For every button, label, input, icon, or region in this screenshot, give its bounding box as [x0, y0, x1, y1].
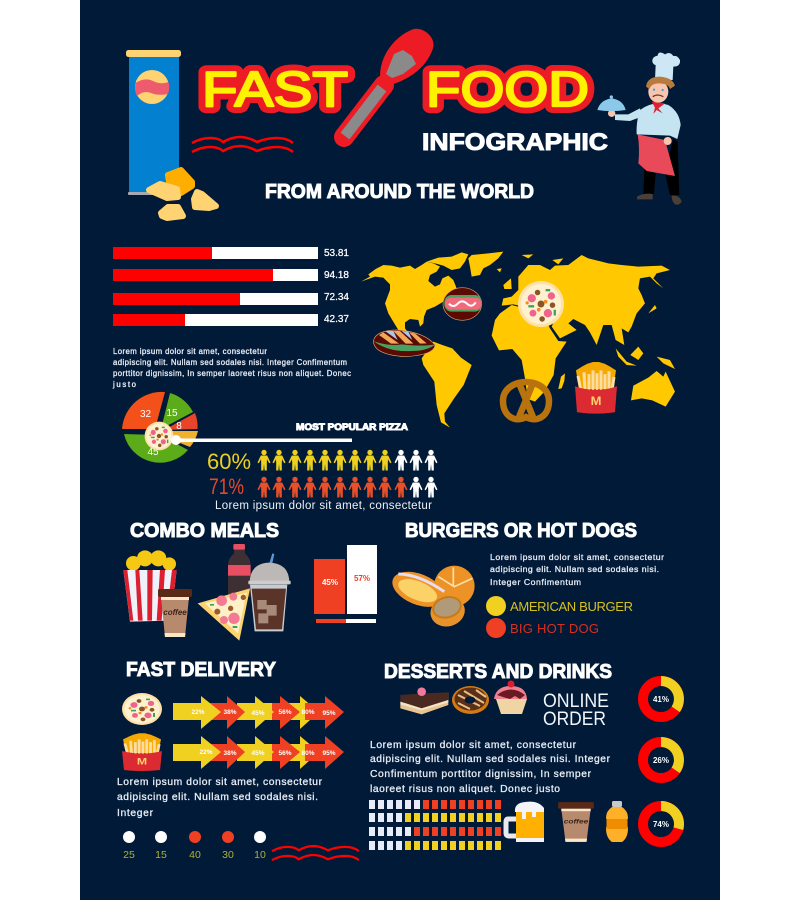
bar chart: four progress bars: 94.18: [324, 270, 349, 281]
arrow row 2: 95%: [322, 750, 336, 757]
title: FOOD: FOOD: [426, 63, 589, 117]
bar chart: four progress bars: [113, 247, 349, 326]
text block: lorem burgers: Integer Confimentum: [490, 577, 581, 587]
donut: 26 percent: [643, 742, 679, 778]
pie chart: pizza share: [122, 392, 198, 463]
icon: iced drink: [248, 553, 291, 631]
stat: 71 percent: 71%: [209, 474, 244, 499]
arrow row 1: 45%: [251, 710, 265, 717]
bar chart: four progress bars: 53.81: [324, 248, 349, 259]
icon: red squiggle bottom: [272, 846, 359, 860]
stat: 60 percent: 60%: [207, 449, 251, 474]
arrow row 2: 56%: [278, 750, 292, 757]
donut: 74 percent: 74%: [653, 820, 669, 829]
text: online order: ORDER: [543, 709, 606, 730]
heading: burgers or hot dogs: BURGERS OR HOT DOGS: [405, 520, 637, 542]
text block: lorem delivery: [117, 777, 323, 819]
text block: lorem under bars: adipiscing elit. Nullam sed sodales nisi. Integer Confimentum: [113, 358, 347, 367]
icon: chips can: [126, 50, 216, 218]
arrow row 1: [173, 696, 344, 729]
bar chart: four progress bars: 42.37: [324, 314, 349, 325]
legend: big hot dog: BIG HOT DOG: [510, 621, 599, 636]
icon: beer mug: [506, 802, 544, 842]
arrow row 2: 22%: [199, 749, 213, 756]
donut: 74 percent: [643, 806, 679, 842]
arrow row 1: 22%: [191, 709, 205, 716]
text block: lorem under bars: justo: [112, 380, 137, 389]
arrow row 1: 95%: [322, 710, 336, 717]
dot legend with numbers: [123, 831, 266, 861]
arrow row 2: 38%: [223, 750, 237, 757]
chart: square unit grid: [369, 800, 501, 850]
pie chart: pizza share: 15: [166, 408, 178, 419]
icon: spatula: [344, 31, 432, 137]
legend: big hot dog: [486, 618, 599, 638]
heading: fast delivery: FAST DELIVERY: [126, 659, 277, 681]
arrow row 1: 56%: [278, 709, 292, 716]
pictogram: red row: [258, 477, 438, 498]
text block: lorem delivery: adipiscing elit. Nullam sed sodales nisi.: [117, 792, 318, 803]
dot legend with numbers: 15: [155, 849, 167, 861]
dot legend with numbers: 25: [123, 849, 135, 861]
icon: cake slice: [400, 687, 448, 714]
icon: fries delivery: [122, 733, 162, 771]
icon: juice bottle: [606, 801, 628, 842]
heading: most popular pizza: MOST POPULAR PIZZA: [296, 422, 408, 433]
text block: lorem desserts: laoreet risus non aliquet. Donec justo: [370, 784, 560, 795]
pie chart: pizza share: 8: [176, 421, 182, 432]
panel: dark page background: [80, 0, 720, 900]
dot legend with numbers: 40: [189, 849, 201, 861]
text block: lorem burgers: [490, 552, 664, 587]
donut: 41 percent: [643, 681, 679, 717]
icon: hot dog on map: [443, 288, 482, 320]
legend: american burger: AMERICAN BURGER: [510, 599, 633, 614]
icon: fries on map: [575, 362, 617, 414]
donut: 41 percent: 41%: [653, 695, 669, 704]
subtitle: from around the world: FROM AROUND THE WORLD: [265, 180, 534, 203]
title: FAST: FAST: [202, 63, 348, 117]
donut: 26 percent: 26%: [653, 756, 669, 765]
icon: pretzel on map: [503, 382, 549, 419]
arrow row 2: [173, 736, 344, 769]
text block: lorem desserts: adipiscing elit. Nullam sed sodales nisi. Integer: [370, 754, 611, 765]
icon: sandwich on map: [373, 330, 436, 357]
pie chart: pizza share: 45: [147, 447, 159, 458]
arrow row 2: 45%: [251, 750, 265, 757]
heading: combo meals: COMBO MEALS: [130, 520, 279, 542]
map: yellow world map: [361, 252, 675, 428]
text block: lorem burgers: Lorem ipsum dolor sit amet, consectetur: [490, 552, 664, 562]
text block: lorem desserts: [370, 740, 611, 795]
text block: lorem under pictogram: Lorem ipsum dolor sit amet, consectetur: [215, 500, 432, 512]
text block: lorem delivery: Lorem ipsum dolor sit amet, consectetur: [117, 777, 323, 788]
icon: coffee takeaway: [558, 802, 594, 842]
bar chart: four progress bars: 72.34: [324, 292, 349, 303]
bar chart: combo 45 vs 57: 45%: [322, 578, 338, 587]
text block: lorem desserts: Confimentum porttitor dignissim, In semper: [370, 769, 592, 780]
text block: lorem burgers: adipiscing elit. Nullam sed sodales nisi.: [490, 564, 659, 574]
text: online order: ONLINE: [543, 691, 609, 712]
pie chart: pizza share: 32: [140, 409, 151, 420]
heading: desserts and drinks: DESSERTS AND DRINKS: [384, 661, 612, 683]
icon: pizza on pie with pointer line: [145, 422, 352, 450]
text block: lorem desserts: Lorem ipsum dolor sit amet, consectetur: [370, 740, 577, 751]
icon: pizza slice: [198, 588, 250, 641]
title: FAST: FAST: [202, 63, 348, 117]
text block: lorem under bars: porttitor dignissim, In semper laoreet risus non aliquet. Donec: [113, 369, 351, 378]
icon: cupcake: [494, 680, 527, 714]
pictogram: yellow row: [258, 450, 438, 470]
icon: pizza on map: [518, 281, 564, 327]
arrow row 2: 80%: [301, 750, 315, 757]
title: FOOD: FOOD: [426, 63, 589, 117]
arrow row 1: 38%: [223, 709, 237, 716]
icon: donut: [452, 686, 489, 714]
icon: pizza delivery: [122, 693, 162, 725]
illustration: chef holding a cloche: [597, 52, 682, 205]
icon: hot dog and burger buns: [387, 565, 475, 630]
icon: popcorn: [123, 550, 177, 622]
icon: cola bottle: [228, 544, 251, 597]
bar chart: combo 45 vs 57: [314, 545, 377, 623]
subtitle: INFOGRAPHIC: INFOGRAPHIC: [422, 129, 608, 156]
text block: lorem under bars: Lorem ipsum dolor sit amet, consectetur: [113, 347, 267, 356]
text block: lorem delivery: Integer: [117, 808, 154, 819]
bar chart: combo 45 vs 57: 57%: [354, 574, 370, 583]
dot legend with numbers: 30: [222, 849, 234, 861]
text block: lorem under bars: [112, 347, 351, 389]
dot legend with numbers: 10: [254, 849, 266, 861]
legend: american burger: [486, 596, 633, 616]
icon: red squiggle under can: [192, 137, 293, 152]
icon: coffee cup: [158, 589, 192, 637]
arrow row 1: 80%: [301, 709, 315, 716]
text: online order: [543, 691, 609, 730]
